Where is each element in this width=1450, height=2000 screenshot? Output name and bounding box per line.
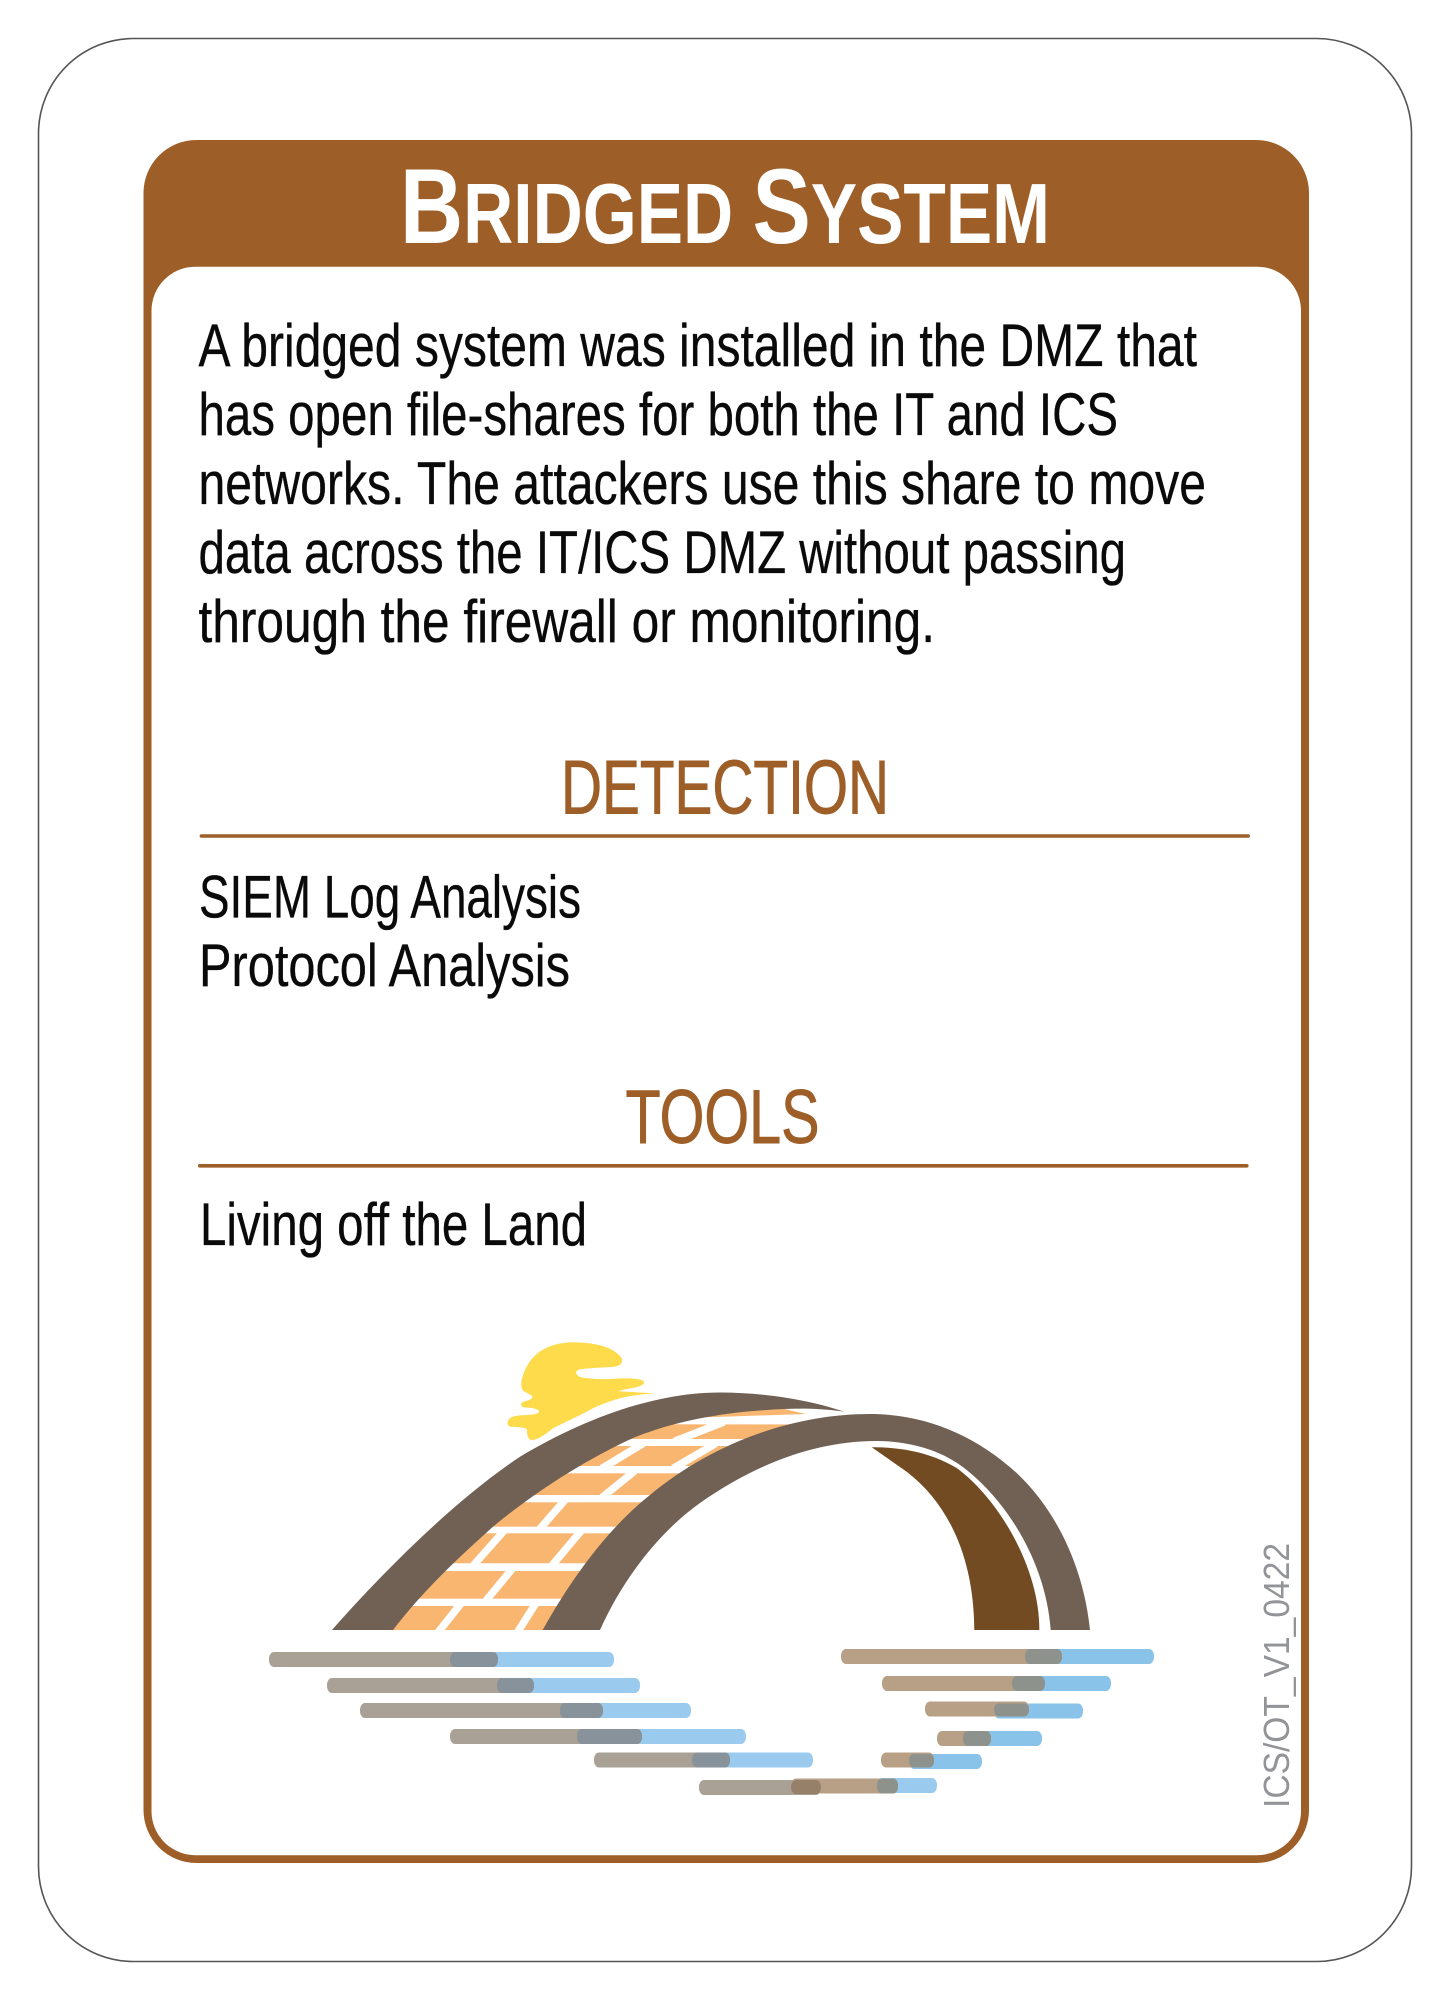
version code: ICS/OT_V1_0422 [1256,1543,1297,1808]
description text block: A bridged system was installed in the DMZ that [198,312,1197,379]
bridge brick deck [363,1405,810,1633]
water reflection: right bars [791,1649,1154,1794]
icon: sun [508,1342,655,1440]
description text block: data across the IT/ICS DMZ without passing [198,519,1126,586]
description text block: networks. The attackers use this share to move [198,450,1206,517]
bridge underside [872,1447,1039,1630]
title: BRIDGED SYSTEM [400,146,1050,266]
description text block: through the firewall or monitoring. [198,588,935,655]
panel: brown frame and header band [144,140,1309,1863]
heading: detection: DETECTION [561,746,889,831]
bridge far-side arch [332,1392,844,1630]
illustration: bridge over water [269,1342,1154,1795]
detection list: SIEM Log Analysis [199,864,581,930]
water reflection: left bars [269,1652,821,1795]
heading: tools: TOOLS [626,1075,820,1160]
bridge near arch [543,1414,1090,1630]
detection list: Protocol Analysis [199,932,570,999]
description text block: has open file-shares for both the IT and ICS [198,381,1118,448]
detection list [199,864,581,999]
description text block [198,312,1206,655]
tools list: Living off the Land [200,1191,587,1258]
